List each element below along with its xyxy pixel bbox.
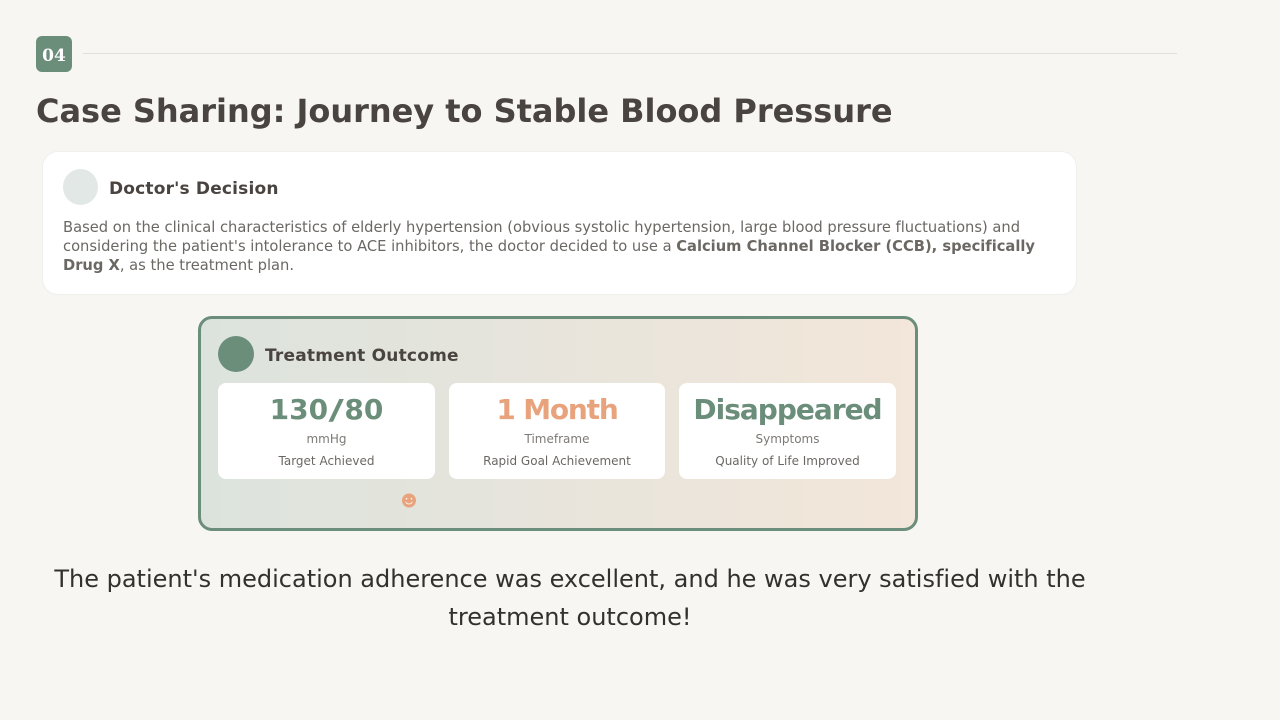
- value: 130 80: [270, 393, 383, 426]
- icon: outcome circle: [218, 336, 254, 372]
- outcome heading: Treatment Outcome: [265, 346, 459, 366]
- panel: treatment outcome: [198, 316, 918, 531]
- section number badge: 04: [42, 46, 66, 66]
- description: Target Achieved: [279, 454, 374, 468]
- title: Case Sharing: Journey to Stable Blood Pressure: [36, 92, 893, 130]
- description: Rapid Goal Achievement: [483, 454, 631, 468]
- closing statement: The patient's medication adherence was excellent, and he was very satisfied with the treatment outcome!: [54, 565, 1086, 631]
- description: Quality of Life Improved: [715, 454, 860, 468]
- header rule: [83, 53, 1177, 54]
- decision heading: Doctor's Decision: [109, 179, 279, 199]
- decision body text: [63, 219, 1035, 274]
- value: /: [329, 393, 344, 426]
- decision body text: Based on the clinical characteristics of elderly hypertension (obvious systolic hypertension, large blood pressure fluctuations) and: [63, 219, 1020, 236]
- stat card: timeframe: [449, 383, 665, 479]
- unit: Symptoms: [755, 432, 820, 446]
- value: 1 Month: [496, 393, 618, 426]
- icon: decision circle: [63, 169, 98, 205]
- value: Disappeared: [693, 393, 882, 426]
- icon: smile: [402, 494, 416, 508]
- panel: doctor's decision: [42, 151, 1077, 295]
- decision body text: considering the patient's intolerance to ACE inhibitors, the doctor decided to use a Calcium Channel Blocker (CCB), specifically: [63, 238, 1035, 255]
- unit: mmHg: [306, 432, 347, 446]
- decision body text: Drug X, as the treatment plan.: [63, 257, 294, 274]
- unit: Timeframe: [525, 432, 589, 446]
- stat card: symptoms: [679, 383, 896, 479]
- stat card: blood pressure: [218, 383, 435, 479]
- section number badge: [36, 36, 72, 72]
